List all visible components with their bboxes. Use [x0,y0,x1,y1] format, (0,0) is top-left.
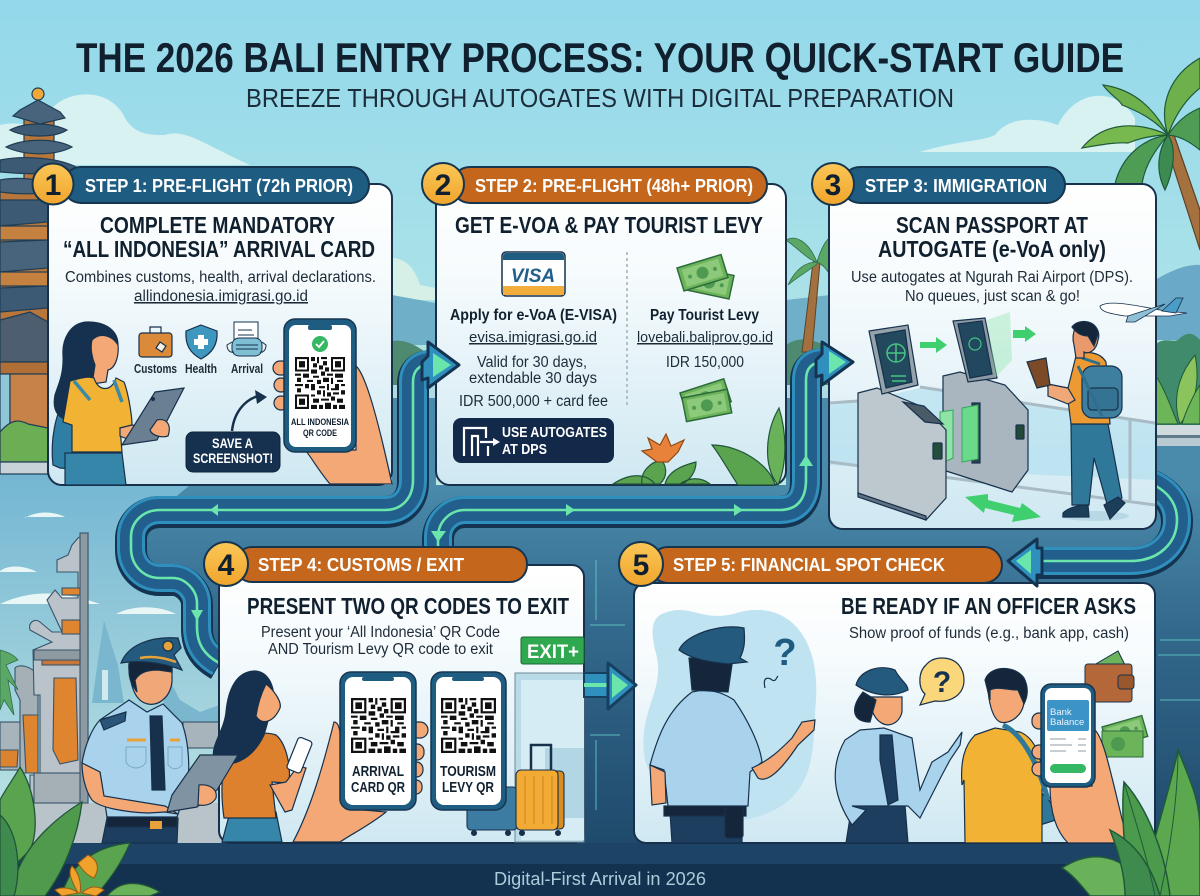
panel: step 2 [422,163,786,485]
phone: bank balance: Balance [1050,717,1084,728]
icon: visa card: VISA [511,266,555,287]
step 1 header: STEP 1: PRE-FLIGHT (72h PRIOR) [85,175,353,196]
step 2 header: 2 [435,169,451,202]
tourist levy details: Pay Tourist Levy [650,307,759,324]
arrival label: Arrival [231,362,263,376]
callout: use autogates [453,418,614,463]
phone: arrival card QR: ARRIVAL [352,764,404,780]
exit sign: EXIT+ [527,642,579,663]
step 1 heading [63,212,375,262]
e-VoA details: evisa.imigrasi.go.id [469,329,597,346]
left lower scene sky [0,474,225,846]
callout: save a screenshot: SCREENSHOT! [193,451,273,466]
customs officer with tablet [82,638,238,843]
dark lower background [131,485,1200,845]
airplane [1100,298,1187,322]
green barriers [940,405,978,464]
left scene clouds and silhouettes [0,513,219,730]
step 5 header [619,542,1002,586]
callout: use autogates: AT DPS [502,442,547,458]
step 4 description [261,624,500,658]
step 5 header: STEP 5: FINANCIAL SPOT CHECK [673,554,946,575]
step 1 heading: COMPLETE MANDATORY [100,212,335,238]
right side circuit traces [590,560,1200,810]
e-VoA details [450,307,617,410]
step 3 header: STEP 3: IMMIGRATION [865,175,1047,196]
plants [613,408,785,485]
path: step 2 connector tube [431,362,824,554]
suitcases [467,745,564,836]
wallet [1085,651,1134,702]
left palm leaves behind gate [0,650,18,715]
autogate second [943,312,1028,492]
arrow to phone [232,390,267,431]
phone: arrival card QR [340,672,416,810]
step 3 description: Use autogates at Ngurah Rai Airport (DPS). [851,269,1133,286]
phone: tourism levy QR [431,672,506,810]
icon: cash top [677,255,734,299]
arrowhead into step 2 [422,342,459,388]
step 2 header [422,163,767,205]
step 5 description: Show proof of funds (e.g., bank app, cash) [849,625,1129,642]
question mark: ? [773,632,797,674]
man in yellow shirt [962,668,1056,843]
icon: health shield [186,325,217,359]
left small palm tree [786,238,830,352]
woman with phone [213,671,313,842]
e-VoA details: IDR 500,000 + card fee [459,393,608,410]
phone with QR code: QR CODE [303,428,337,439]
woman with tablet [52,322,184,485]
e-VoA details: Valid for 30 days, [477,354,587,371]
footer band [0,843,1200,896]
officer from behind [650,627,815,843]
path: step 3 connector tube [1036,483,1177,563]
callout: use autogates: USE AUTOGATES [502,425,607,441]
path: step 1 connector tube [131,364,432,665]
phone: bank balance: Bank [1050,707,1072,718]
exit door [515,673,584,842]
arrowhead into step 5 from step 3 [1008,539,1042,586]
bottom right foliage [1062,750,1200,896]
step 3 description [851,269,1133,305]
icon: arrival form and mask [227,322,266,356]
icon: customs suitcase [139,327,172,357]
arrow: step 4 to step 5 [584,663,636,709]
hand holding phone [273,361,392,484]
step 2 heading: GET E-VOA & PAY TOURIST LEVY [455,212,763,238]
tourist levy details [637,307,773,371]
green guide arrows [920,326,1041,522]
step 1 heading: “ALL INDONESIA” ARRIVAL CARD [63,236,375,262]
phone with QR code [284,319,356,452]
step 1 description: Combines customs, health, arrival declarations. [65,269,376,286]
step 4 header [204,542,527,586]
step 3 header: 3 [825,169,841,202]
step 3 heading: AUTOGATE (e-VoA only) [878,236,1106,262]
top right palm tree [1082,58,1200,250]
panel: step 3 [812,163,1187,529]
exit sign [521,637,584,664]
phone with QR code: ALL INDONESIA [291,417,349,428]
step 3 heading: SCAN PASSPORT AT [896,212,1088,238]
left pagoda temple [0,88,78,474]
step 1 header: 1 [45,169,61,202]
panel: step 1 [32,164,392,485]
customs label: Customs [134,362,177,376]
cash [1102,716,1148,757]
left gate temple [0,533,222,843]
female officer [835,668,962,843]
step 1 description: allindonesia.imigrasi.go.id [134,288,308,305]
hand holding bank phone [1032,713,1128,843]
tourist levy details: lovebali.baliprov.go.id [637,329,773,346]
callout: save a screenshot [186,432,280,472]
step 2 header: STEP 2: PRE-FLIGHT (48h+ PRIOR) [475,175,753,196]
subtitle: BREEZE THROUGH AUTOGATES WITH DIGITAL PREPARATION [246,83,954,113]
question mark [764,632,797,688]
step 3 header [812,163,1065,205]
panel: step 4 [204,542,584,843]
speech bubble: ? [933,666,951,699]
arrowhead into step 3 [816,342,853,385]
speech bubble [920,658,964,705]
traveler with passport [1027,322,1129,521]
icon: cash bottom [680,379,732,422]
phone: tourism levy QR: LEVY QR [442,780,494,796]
footer text: Digital-First Arrival in 2026 [494,869,706,889]
step 3 description: No queues, just scan & go! [905,288,1080,305]
step 4 description: AND Tourism Levy QR code to exit [268,641,494,658]
e-VoA details: Apply for e-VoA (E-VISA) [450,307,617,324]
background sky [0,0,1200,500]
step 1 description [65,269,376,305]
icon: visa card [502,252,565,296]
bottom left foliage [0,767,160,896]
step 4 heading: PRESENT TWO QR CODES TO EXIT [247,593,569,619]
phone: tourism levy QR: TOURISM [440,764,496,780]
step 4 header: 4 [218,549,235,582]
clouds [0,94,1135,165]
background scenery: hills and sea in gaps [392,258,1200,490]
step 4 header: STEP 4: CUSTOMS / EXIT [258,554,465,575]
step 4 description: Present your ‘All Indonesia’ QR Code [261,624,500,641]
step 1 header [32,164,369,204]
tourist levy details: IDR 150,000 [666,354,744,371]
panel: step 5 [619,542,1155,843]
hand holding phones [293,722,428,842]
health label: Health [185,362,217,376]
light blue blob [643,610,816,821]
railing and glass [830,387,1155,505]
phone: arrival card QR: CARD QR [351,780,405,796]
step 3 heading [878,212,1106,262]
autogate first [858,325,946,520]
callout: save a screenshot: SAVE A [212,436,253,451]
phone: bank balance [1041,684,1095,787]
e-VoA details: extendable 30 days [469,370,597,387]
step 5 heading: BE READY IF AN OFFICER ASKS [841,593,1136,619]
right side plants and wall [1155,334,1200,446]
step 5 header: 5 [633,549,649,582]
